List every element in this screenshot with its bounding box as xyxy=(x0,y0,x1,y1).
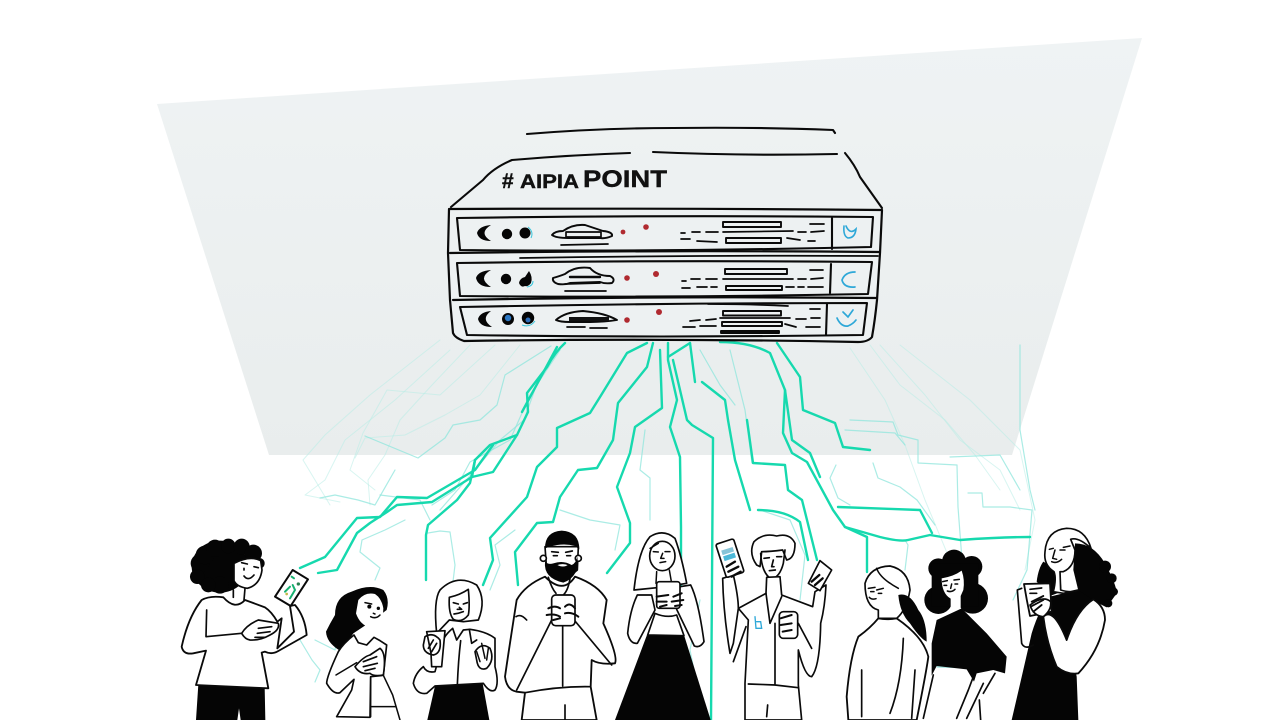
phone xyxy=(275,570,308,606)
server label: POINT xyxy=(583,166,667,193)
hair outline xyxy=(436,580,482,633)
pants xyxy=(196,684,265,720)
arm xyxy=(983,673,995,693)
head xyxy=(1045,528,1091,593)
blouse xyxy=(327,635,387,717)
hair xyxy=(1037,543,1118,607)
black top xyxy=(932,608,1007,682)
arm xyxy=(1043,599,1105,674)
face xyxy=(761,550,785,579)
chest phone xyxy=(779,612,798,638)
face xyxy=(942,571,964,609)
rack unit 1 xyxy=(457,216,873,251)
rack unit 3 xyxy=(460,303,867,336)
phone and hands xyxy=(657,582,680,608)
face xyxy=(234,558,262,588)
hand xyxy=(242,620,279,640)
hair xyxy=(752,535,795,567)
face xyxy=(449,589,469,621)
head xyxy=(545,547,578,577)
person 1: curly hair woman with raised phone xyxy=(182,539,308,720)
arms xyxy=(628,595,655,643)
person 9: woman in black dress with phone xyxy=(1012,528,1118,720)
phone xyxy=(1024,583,1052,616)
legs/skirt xyxy=(923,675,983,720)
panel: grey trapezoid backdrop xyxy=(157,38,1142,455)
shirt xyxy=(182,597,307,688)
face xyxy=(650,541,675,571)
blouse xyxy=(413,628,497,694)
phone and hand xyxy=(427,631,445,667)
person 4: bearded man with phone xyxy=(505,531,616,720)
ponytail xyxy=(898,594,927,642)
head xyxy=(865,566,910,618)
torso xyxy=(505,577,616,720)
hair xyxy=(326,587,388,652)
person 2: dark-haired woman with phone xyxy=(326,587,400,720)
body xyxy=(723,575,826,720)
curly hair xyxy=(190,539,265,594)
server label: AIPIA xyxy=(520,172,579,193)
person 6: curly-haired man with two phones xyxy=(716,535,832,720)
hair and beard xyxy=(545,531,579,549)
server body xyxy=(448,153,882,342)
skirt xyxy=(615,634,711,720)
person 8: woman with big dark hair and black top xyxy=(923,550,1007,720)
server label: # xyxy=(502,170,514,193)
right phone xyxy=(808,561,832,591)
notebook xyxy=(1017,588,1033,647)
left phone xyxy=(716,539,744,578)
faint network lines xyxy=(300,340,1035,700)
face xyxy=(356,593,383,627)
server: stacked rack unit with label xyxy=(448,128,882,342)
rack unit 2 xyxy=(457,261,872,297)
skirt xyxy=(427,683,489,720)
hair outline xyxy=(634,533,687,590)
person 7: woman with ponytail in profile xyxy=(847,566,928,720)
hair xyxy=(924,550,988,614)
person 3: long-haired woman holding phone xyxy=(413,580,497,720)
network lines: bright connections from server to people xyxy=(300,342,1030,720)
hand with phone xyxy=(355,648,384,676)
dress xyxy=(1012,590,1093,720)
sweater xyxy=(847,618,928,720)
phone xyxy=(552,595,575,626)
person 5: woman in black skirt with phone xyxy=(615,533,711,720)
top xyxy=(648,613,684,636)
